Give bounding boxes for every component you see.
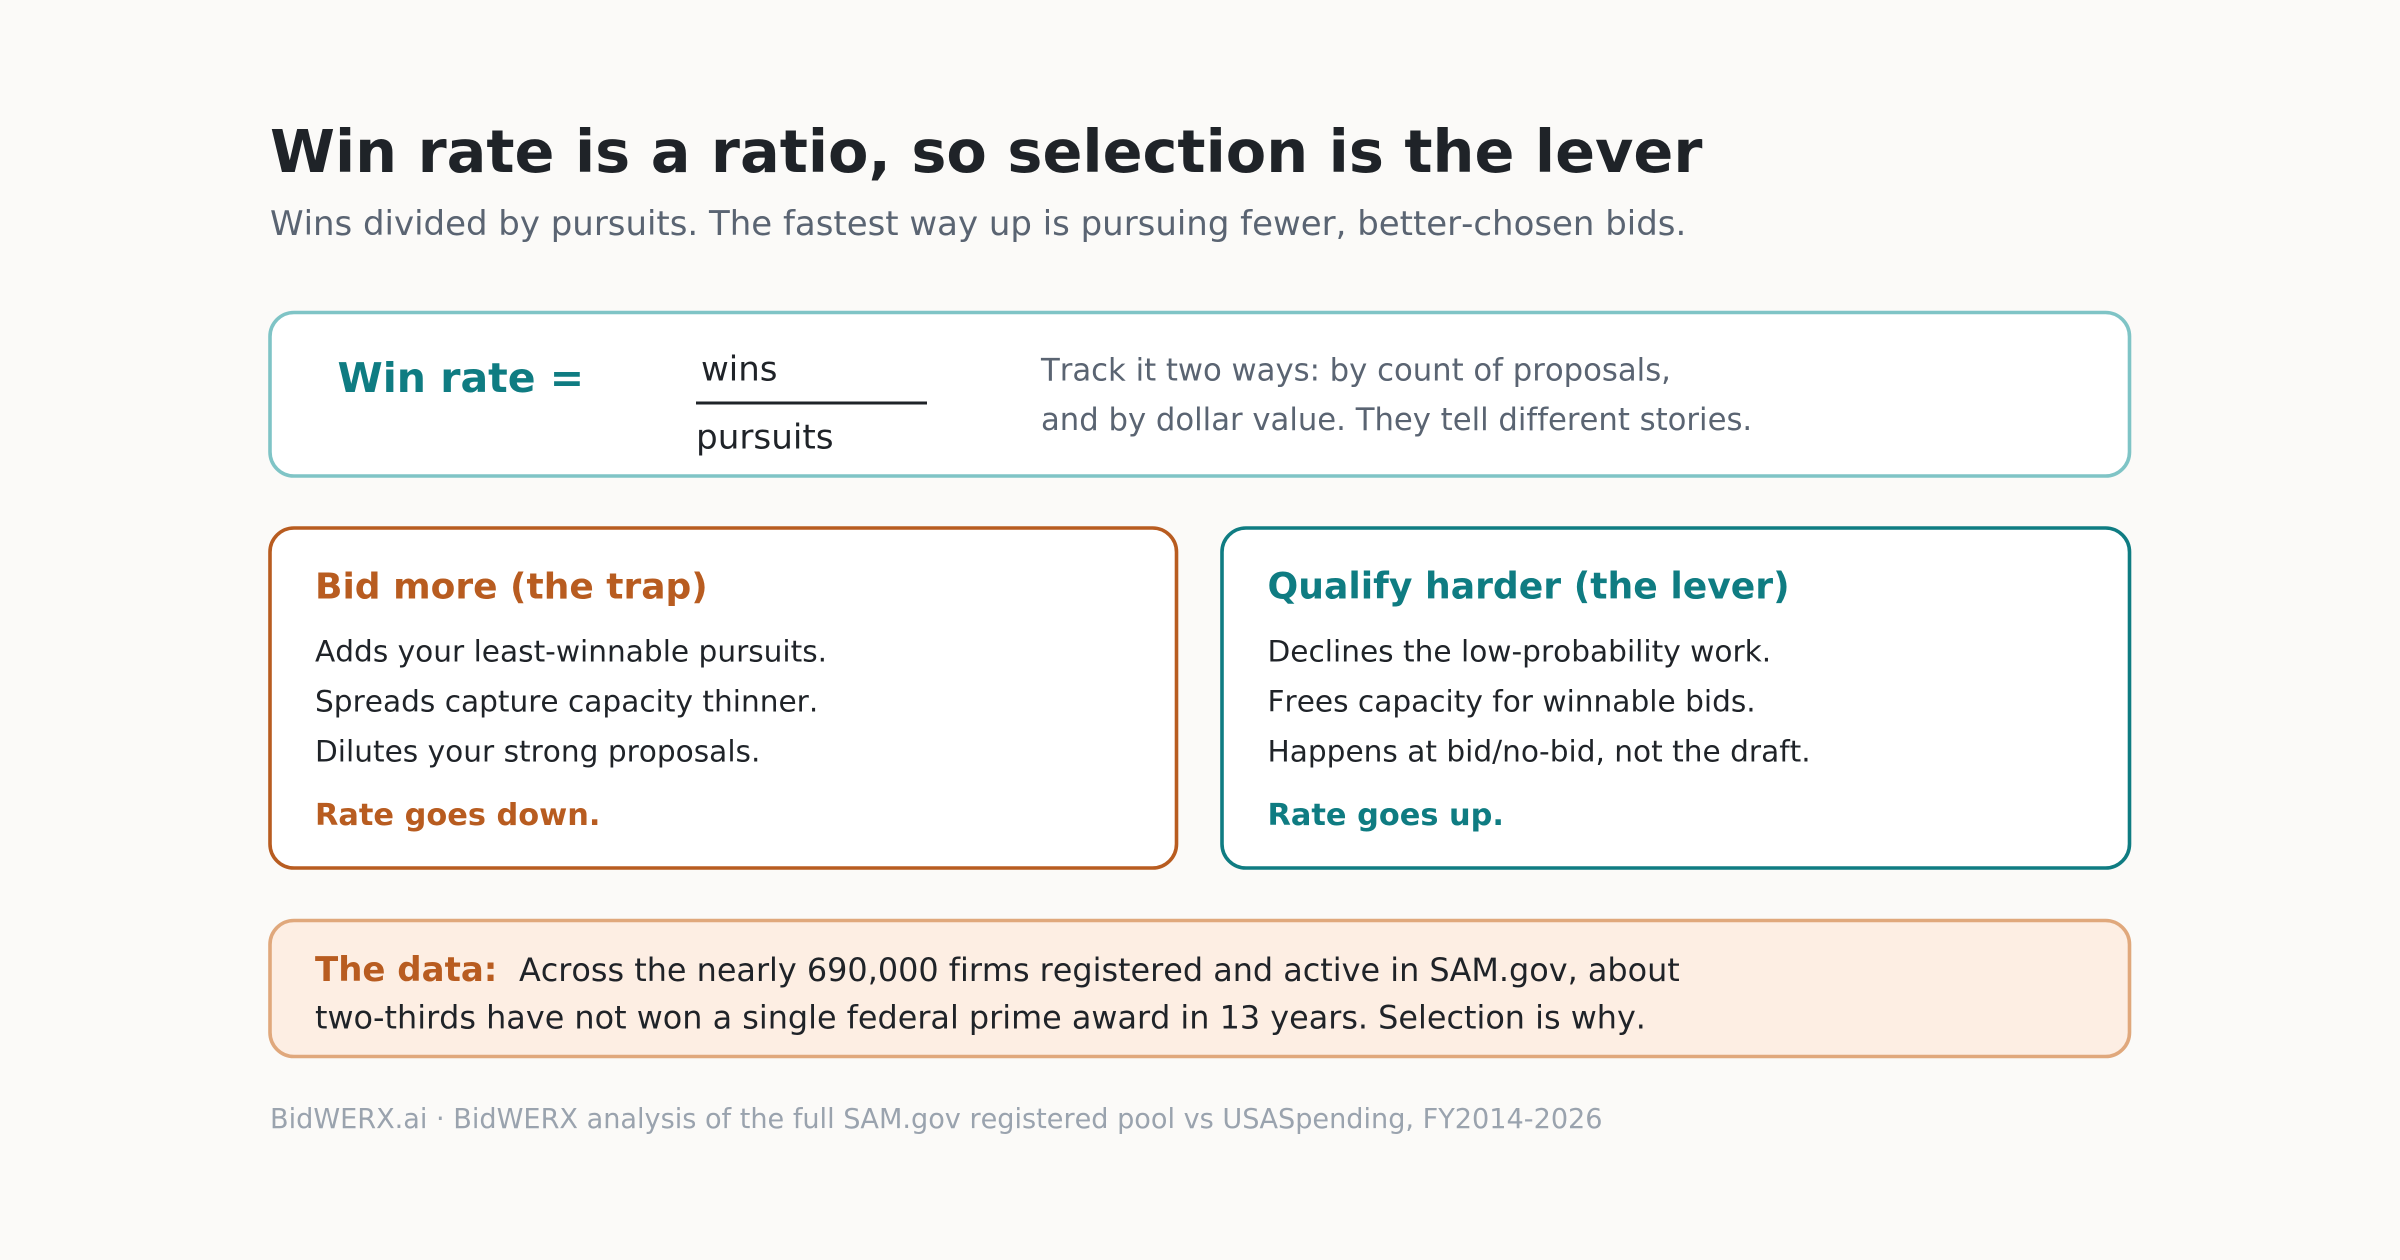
panel: formula	[270, 312, 2130, 476]
subtitle: Wins divided by pursuits. The fastest way up is pursuing fewer, better-chosen bids.	[270, 204, 1686, 244]
card heading: Bid more (the trap)	[315, 566, 708, 608]
card body: Spreads capture capacity thinner.	[315, 684, 818, 718]
panel: qualify harder	[1222, 528, 2130, 868]
formula note: Track it two ways: by count of proposals,	[1040, 354, 1671, 388]
card body: Declines the low-probability work.	[1268, 634, 1771, 668]
formula label: Win rate =	[338, 354, 584, 402]
card body: Happens at bid/no-bid, not the draft.	[1268, 734, 1811, 768]
formula note: and by dollar value. They tell different stories.	[1041, 403, 1752, 438]
card result: Rate goes up.	[1268, 798, 1504, 833]
panel: bid more	[270, 528, 1176, 868]
fraction	[696, 350, 927, 458]
fraction: wins	[701, 350, 778, 390]
callout label: The data:	[315, 950, 497, 990]
fraction: pursuits	[696, 418, 834, 458]
card body: Frees capacity for winnable bids.	[1268, 684, 1756, 718]
callout text: two-thirds have not won a single federal prime award in 13 years. Selection is why.	[315, 998, 1646, 1036]
card body: Dilutes your strong proposals.	[315, 734, 760, 768]
title: Win rate is a ratio, so selection is the lever	[270, 117, 1702, 186]
callout text: Across the nearly 690,000 firms registered and active in SAM.gov, about	[519, 951, 1680, 989]
panel: the data callout	[270, 920, 2130, 1056]
footer source: BidWERX.ai · BidWERX analysis of the full SAM.gov registered pool vs USASpending, FY2014-2026	[270, 1104, 1603, 1135]
card heading: Qualify harder (the lever)	[1268, 564, 1790, 608]
card body: Adds your least-winnable pursuits.	[315, 634, 827, 668]
card result: Rate goes down.	[315, 798, 600, 833]
